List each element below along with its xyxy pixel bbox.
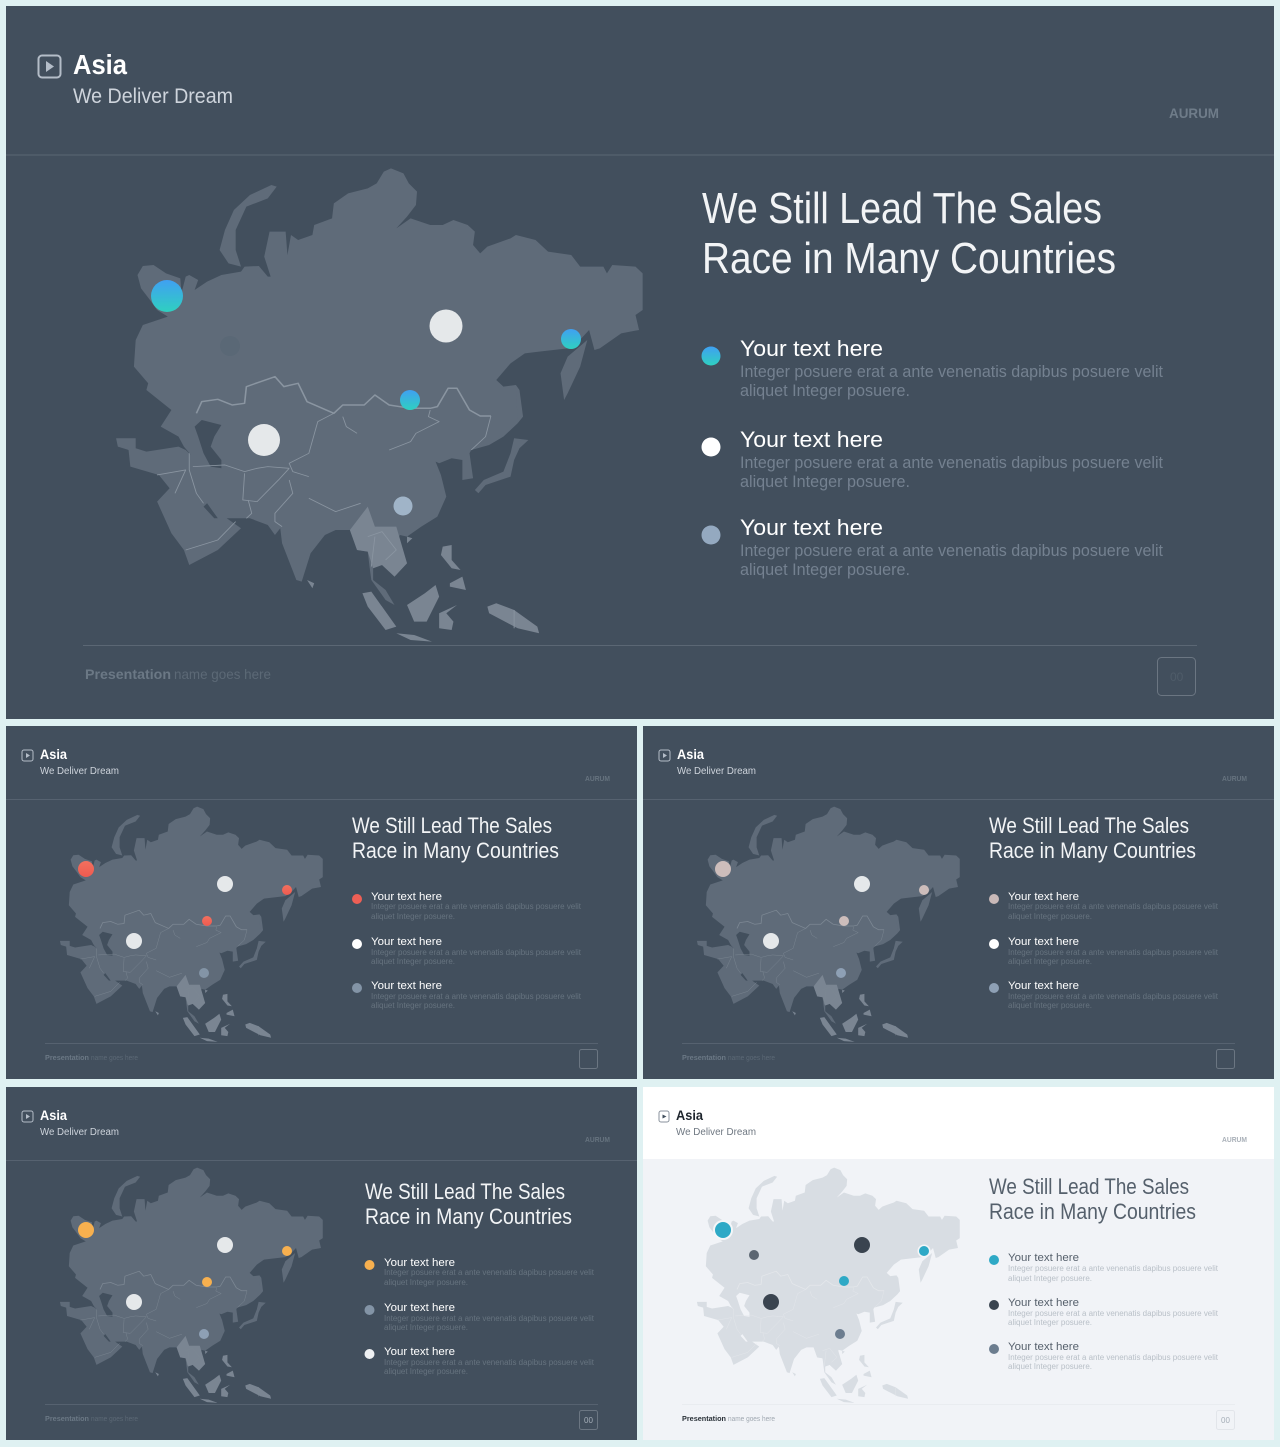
subheading: We Deliver Dream — [73, 85, 233, 108]
legend: Your text here — [1008, 980, 1079, 992]
brand label: AURUM — [585, 776, 610, 783]
legend: Integer posuere erat a ante venenatis dapibus posuere velit — [384, 1358, 595, 1367]
title: Race in Many Countries — [702, 234, 1116, 283]
map markers — [151, 280, 581, 516]
title — [352, 813, 559, 863]
legend: Integer posuere erat a ante venenatis dapibus posuere velit — [384, 1268, 595, 1277]
page number box: 00 — [584, 1416, 593, 1425]
legend: Integer posuere erat a ante venenatis dapibus posuere velit — [371, 902, 582, 911]
legend item 2 — [702, 427, 1163, 491]
map markers — [78, 1222, 292, 1339]
map markers — [715, 861, 929, 978]
icon: play button — [659, 750, 670, 761]
legend: Integer posuere erat a ante venenatis dapibus posuere velit — [1008, 1353, 1219, 1362]
map — [60, 1168, 323, 1403]
legend: aliquet Integer posuere. — [1008, 912, 1092, 921]
footer text: name goes here — [174, 666, 271, 682]
title: Race in Many Countries — [989, 838, 1196, 863]
brand label: AURUM — [1222, 1137, 1247, 1144]
footer text: name goes here — [91, 1055, 138, 1062]
footer text: name goes here — [91, 1416, 138, 1423]
panel: thumbnail orange — [6, 1087, 637, 1440]
legend item 1 — [702, 336, 1163, 400]
page number box: 00 — [1170, 670, 1184, 684]
map: Asia — [116, 168, 643, 642]
footer text — [682, 1416, 775, 1423]
legend: aliquet Integer posuere. — [384, 1278, 468, 1287]
legend: Integer posuere erat a ante venenatis dapibus posuere velit — [371, 992, 582, 1001]
legend: Integer posuere erat a ante venenatis dapibus posuere velit — [371, 948, 582, 957]
legend: aliquet Integer posuere. — [384, 1367, 468, 1376]
map — [697, 807, 960, 1042]
legend: Your text here — [371, 891, 442, 903]
legend: aliquet Integer posuere. — [371, 1001, 455, 1010]
page number box — [580, 1050, 598, 1068]
title — [702, 184, 1116, 283]
legend item 3: Your text here — [740, 515, 883, 540]
page number box — [580, 1410, 598, 1430]
icon: play button — [38, 56, 60, 78]
legend: aliquet Integer posuere. — [1008, 1274, 1092, 1283]
legend: Your text here — [371, 980, 442, 992]
footer text — [45, 1416, 138, 1423]
icon: play button — [22, 1111, 33, 1122]
brand label: AURUM — [1169, 105, 1219, 121]
panel: thumbnail light theme — [643, 1087, 1274, 1440]
footer text — [45, 1055, 138, 1062]
subheading: We Deliver Dream — [40, 766, 119, 777]
legend: Your text here — [384, 1302, 455, 1314]
subheading: We Deliver Dream — [40, 1127, 119, 1138]
legend: Integer posuere erat a ante venenatis dapibus posuere velit — [1008, 992, 1219, 1001]
footer text — [85, 666, 271, 682]
title: Race in Many Countries — [365, 1204, 572, 1229]
legend: Integer posuere erat a ante venenatis dapibus posuere velit — [384, 1314, 595, 1323]
legend: aliquet Integer posuere. — [1008, 1318, 1092, 1327]
legend item 1: aliquet Integer posuere. — [740, 382, 910, 400]
legend item 2: Your text here — [740, 427, 883, 452]
footer text: name goes here — [728, 1416, 775, 1423]
legend: aliquet Integer posuere. — [371, 957, 455, 966]
title — [365, 1179, 572, 1229]
legend: Your text here — [1008, 1252, 1079, 1264]
legend: Your text here — [1008, 1341, 1079, 1353]
title: We Still Lead The Sales — [365, 1179, 565, 1204]
map markers — [713, 1220, 930, 1339]
legend: aliquet Integer posuere. — [371, 912, 455, 921]
brand label: AURUM — [585, 1137, 610, 1144]
footer text: name goes here — [728, 1055, 775, 1062]
footer text: Presentation — [45, 1055, 89, 1062]
title — [989, 813, 1196, 863]
footer text: Presentation — [682, 1055, 726, 1062]
title: We Still Lead The Sales — [989, 813, 1189, 838]
panel: thumbnail red — [6, 726, 637, 1079]
icon: play button — [659, 1111, 669, 1122]
legend: aliquet Integer posuere. — [1008, 1001, 1092, 1010]
legend: Your text here — [384, 1346, 455, 1358]
legend item 3: Integer posuere erat a ante venenatis dapibus posuere velit — [740, 542, 1163, 560]
title: We Still Lead The Sales — [352, 813, 552, 838]
page number box — [1216, 1410, 1234, 1430]
panel: thumbnail neutral — [643, 726, 1274, 1079]
icon: play button — [22, 750, 33, 761]
page number box — [1216, 1050, 1234, 1068]
brand label: AURUM — [1222, 776, 1247, 783]
legend — [364, 1257, 595, 1376]
heading: Asia — [40, 1108, 67, 1123]
legend: Your text here — [1008, 891, 1079, 903]
legend item 1: Your text here — [740, 336, 883, 361]
map — [697, 1168, 960, 1403]
map markers — [78, 861, 292, 978]
legend: aliquet Integer posuere. — [1008, 957, 1092, 966]
title: We Still Lead The Sales — [702, 184, 1102, 233]
title: Race in Many Countries — [352, 838, 559, 863]
footer text — [682, 1055, 775, 1062]
legend: aliquet Integer posuere. — [384, 1323, 468, 1332]
legend item 3 — [702, 515, 1163, 579]
legend: Your text here — [1008, 1297, 1079, 1309]
legend: Your text here — [384, 1257, 455, 1269]
title: Race in Many Countries — [989, 1199, 1196, 1224]
legend: Integer posuere erat a ante venenatis dapibus posuere velit — [1008, 902, 1219, 911]
legend item 2: aliquet Integer posuere. — [740, 473, 910, 491]
page number box: 00 — [1221, 1416, 1230, 1425]
legend: Integer posuere erat a ante venenatis dapibus posuere velit — [1008, 948, 1219, 957]
legend — [989, 891, 1219, 1010]
legend: Integer posuere erat a ante venenatis dapibus posuere velit — [1008, 1264, 1219, 1273]
legend item 1: Integer posuere erat a ante venenatis dapibus posuere velit — [740, 363, 1163, 381]
page number box — [1158, 658, 1196, 696]
subheading: We Deliver Dream — [677, 766, 756, 777]
legend: Your text here — [1008, 936, 1079, 948]
heading: Asia — [677, 747, 704, 762]
legend item 3: aliquet Integer posuere. — [740, 561, 910, 579]
subheading: We Deliver Dream — [676, 1127, 756, 1138]
legend — [989, 1252, 1219, 1371]
footer text: Presentation — [682, 1416, 726, 1423]
legend: aliquet Integer posuere. — [1008, 1362, 1092, 1371]
heading: Asia — [40, 747, 67, 762]
footer text: Presentation — [85, 666, 171, 682]
title: We Still Lead The Sales — [989, 1174, 1189, 1199]
map — [60, 807, 323, 1042]
heading: Asia — [676, 1108, 703, 1123]
legend item 2: Integer posuere erat a ante venenatis dapibus posuere velit — [740, 454, 1163, 472]
footer text: Presentation — [45, 1416, 89, 1423]
panel: main slide — [6, 6, 1274, 719]
legend — [352, 891, 582, 1010]
heading: Asia: Asia — [73, 49, 127, 80]
legend: Integer posuere erat a ante venenatis dapibus posuere velit — [1008, 1309, 1219, 1318]
legend: Your text here — [371, 936, 442, 948]
title — [989, 1174, 1196, 1224]
